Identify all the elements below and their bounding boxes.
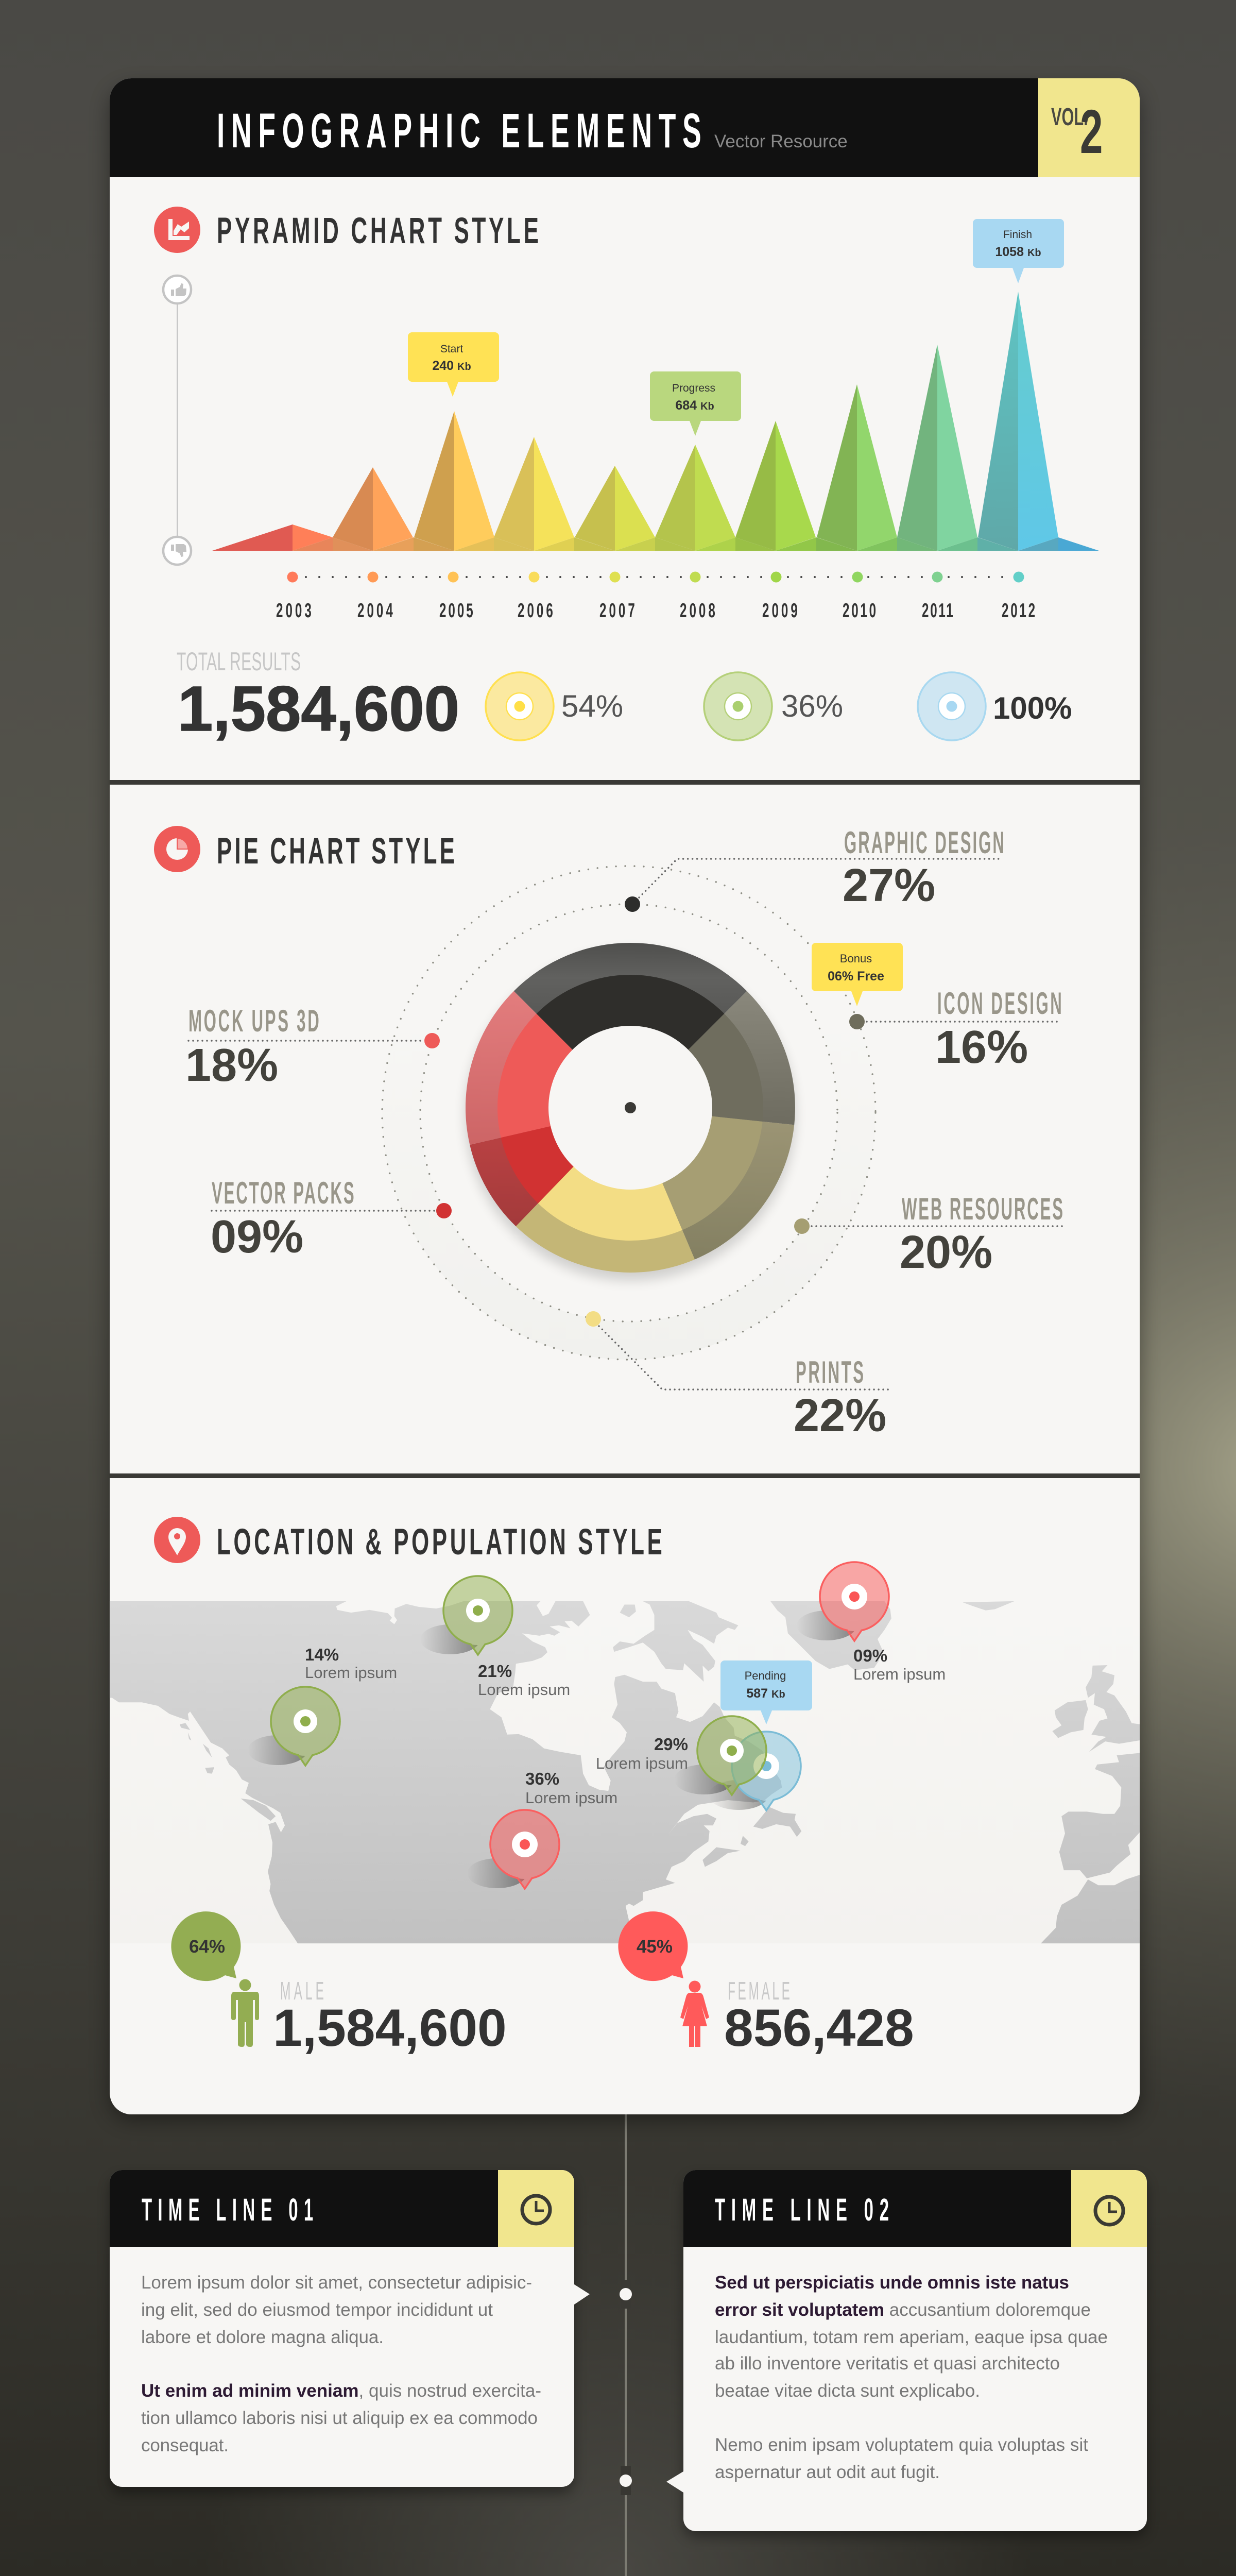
arrow: [574, 2284, 590, 2304]
label: web resources: [900, 1192, 1063, 1278]
callout: pending: Pending: [745, 1669, 786, 1682]
pyramid chart: [212, 292, 1099, 551]
pin label: 21%: [478, 1662, 570, 1699]
female statistic: [618, 1911, 914, 2057]
callout: bonus: Bonus: [840, 952, 872, 965]
callout: start: [408, 332, 499, 397]
label: web resources: WEB RESOURCES: [902, 1192, 1063, 1227]
callout: finish: Finish: [1003, 229, 1032, 241]
icon: location pin: [154, 1517, 200, 1563]
pin label: 29%: 29%: [654, 1735, 688, 1754]
label: vector packs: VECTOR PACKS: [212, 1176, 354, 1211]
label: icon design: ICON DESIGN: [937, 987, 1062, 1021]
header: [110, 2170, 574, 2247]
bubble: 64%: 64%: [189, 1937, 225, 1957]
pin label: 14%: [305, 1645, 397, 1682]
header: TIME LINE 01: [142, 2193, 313, 2228]
body text: ab illo inventore veritatis et quasi architecto: [715, 2353, 1060, 2374]
scale axis with thumbs: [163, 276, 191, 565]
year labels: 2003: [276, 599, 312, 621]
body text: ing elit, sed do eiusmod tempor incididunt ut: [141, 2300, 493, 2320]
year labels: 2005: [439, 599, 473, 621]
label: vector packs: [211, 1176, 354, 1263]
map: europe and africa: [963, 1601, 1140, 1943]
icon: pie: [154, 826, 200, 872]
body text: Nemo enim ipsam voluptatem quia voluptas sit: [715, 2435, 1088, 2455]
panel: time line 01: [110, 2170, 590, 2494]
panel: time line 02: [666, 2170, 1147, 2537]
dotted rings: [382, 866, 876, 1360]
total results label: TOTAL RESULTS: [177, 647, 301, 676]
callout: progress: 684 Kb: [675, 398, 714, 413]
pin: 14%: [248, 1687, 340, 1766]
callout: start: 240 Kb: [432, 359, 471, 373]
label: prints: [794, 1355, 886, 1442]
header bar: [110, 78, 1140, 177]
bubble: 64%: [171, 1911, 241, 1981]
pin label: 21%: 21%: [478, 1662, 512, 1681]
body text: [141, 2273, 541, 2455]
map: americas and greenland: [110, 1601, 891, 1943]
stat: 36%: [704, 672, 843, 740]
heading: PIE CHART STYLE: [217, 831, 455, 872]
pin label: 36%: Lorem ipsum: [525, 1789, 617, 1807]
pin label: 36%: [525, 1769, 617, 1807]
body text: labore et dolore magna aliqua.: [141, 2327, 384, 2347]
heading: PYRAMID CHART STYLE: [217, 210, 539, 251]
body text: Ut enim ad minim veniam, quis nostrud exercita-: [141, 2381, 541, 2401]
year labels: 2007: [599, 599, 635, 621]
year labels: 2010: [843, 599, 876, 621]
label: icon design: 16%: [935, 1022, 1028, 1073]
callout: finish: [973, 219, 1064, 283]
panel: location and population: [110, 1517, 1140, 2057]
year labels: 2006: [518, 599, 553, 621]
pin label: 09%: Lorem ipsum: [853, 1665, 946, 1683]
body text: laudantium, totam rem aperiam, eaque ipsa quae: [715, 2327, 1108, 2347]
stat: 100%: [918, 672, 1072, 740]
stat: 54%: [486, 672, 623, 740]
year labels: [276, 599, 1035, 621]
year labels: 2008: [680, 599, 715, 621]
year labels: 2004: [357, 599, 393, 621]
pin label: 09%: 09%: [853, 1646, 887, 1665]
label: female: FEMALE: [728, 1977, 790, 2005]
label: mock ups 3d: [185, 1004, 319, 1091]
timeline node 1: [620, 2280, 632, 2309]
header: [683, 2170, 1147, 2247]
header: TIME LINE 02: [715, 2193, 889, 2228]
volume badge: VOL.: [1051, 103, 1088, 131]
bubble: 45%: [618, 1911, 688, 1981]
volume badge: 2: [1080, 96, 1103, 166]
label: prints: PRINTS: [796, 1355, 864, 1390]
number: male: 1,584,600: [273, 1998, 507, 2057]
icon: clock: [1095, 2197, 1123, 2225]
total results number: 1,584,600: [178, 674, 459, 744]
panel: pie chart: [154, 826, 1063, 1442]
icon: female figure: [680, 1980, 709, 2047]
timeline vertical line: [625, 2114, 627, 2576]
main card panel: [110, 78, 1140, 2120]
label: web resources: 20%: [900, 1227, 992, 1278]
pin label: 36%: 36%: [525, 1769, 559, 1788]
year labels: 2011: [922, 599, 953, 621]
arrow: [666, 2471, 683, 2493]
body text: Lorem ipsum dolor sit amet, consectetur adipisic-: [141, 2273, 532, 2293]
body text: consequat.: [141, 2435, 229, 2455]
volume badge: [1038, 78, 1140, 177]
icon: chart: [154, 207, 200, 253]
label: graphic design: GRAPHIC DESIGN: [844, 826, 1004, 860]
label: mock ups 3d: MOCK UPS 3D: [188, 1004, 319, 1039]
panel: pyramid chart: [154, 207, 1099, 744]
label: male: MALE: [280, 1977, 324, 2005]
callout: start: Start: [440, 343, 463, 355]
leader lines: [188, 859, 1063, 1389]
year labels: 2012: [1002, 599, 1035, 621]
pin label: 29%: [596, 1735, 688, 1772]
body text: tion ullamco laboris nisi ut aliquip ex ea commodo: [141, 2408, 538, 2428]
label: icon design: [935, 987, 1062, 1073]
pin label: 14%: Lorem ipsum: [305, 1664, 397, 1682]
donut chart: [466, 943, 795, 1280]
pin: 21%: [420, 1576, 512, 1655]
body text: aspernatur aut odit aut fugit.: [715, 2462, 940, 2482]
label: prints: 22%: [794, 1390, 886, 1442]
male statistic: [171, 1911, 507, 2057]
marker dots: [424, 896, 865, 1327]
callout: bonus: 06% Free: [828, 969, 884, 984]
body text: error sit voluptatem accusantium doloremque: [715, 2300, 1091, 2320]
number: female: 856,428: [724, 1998, 914, 2057]
stat: 36%: 36%: [781, 689, 843, 723]
timeline dots: [287, 572, 1024, 582]
map: [110, 1601, 1140, 1943]
callout: pending: [720, 1660, 812, 1724]
timeline node 2: [620, 2466, 632, 2495]
subtitle: Vector Resource: [714, 131, 848, 151]
icon: clock: [522, 2196, 550, 2224]
pin label: 09%: [853, 1646, 946, 1683]
body text: Sed ut perspiciatis unde omnis iste natus: [715, 2273, 1069, 2293]
body text: beatae vitae dicta sunt explicabo.: [715, 2381, 980, 2401]
pin: pending: [709, 1732, 801, 1810]
pin: 36%: [467, 1810, 559, 1889]
callout: progress: [650, 371, 741, 436]
stat: 100%: 100%: [993, 691, 1072, 725]
label: graphic design: [843, 826, 1004, 911]
label: mock ups 3d: 18%: [185, 1040, 278, 1091]
label: vector packs: 09%: [211, 1211, 303, 1263]
callout: bonus: [812, 943, 903, 1006]
icon: male figure: [231, 1979, 259, 2047]
label: graphic design: 27%: [843, 860, 935, 911]
pin label: 14%: 14%: [305, 1645, 339, 1664]
bubble: 45%: 45%: [637, 1937, 673, 1957]
heading: LOCATION & POPULATION STYLE: [217, 1521, 662, 1563]
stat: 54%: 54%: [561, 689, 623, 723]
title: INFOGRAPHIC ELEMENTS: [217, 104, 701, 158]
pin: 29%: [674, 1716, 766, 1795]
year labels: 2009: [762, 599, 798, 621]
pin label: 29%: Lorem ipsum: [596, 1754, 688, 1772]
body text: [715, 2273, 1108, 2482]
callout: finish: 1058 Kb: [995, 245, 1041, 259]
callout: progress: Progress: [672, 382, 715, 394]
pin: 09%: [797, 1562, 889, 1641]
pin label: 21%: Lorem ipsum: [478, 1681, 570, 1699]
callout: pending: 587 Kb: [746, 1686, 785, 1701]
